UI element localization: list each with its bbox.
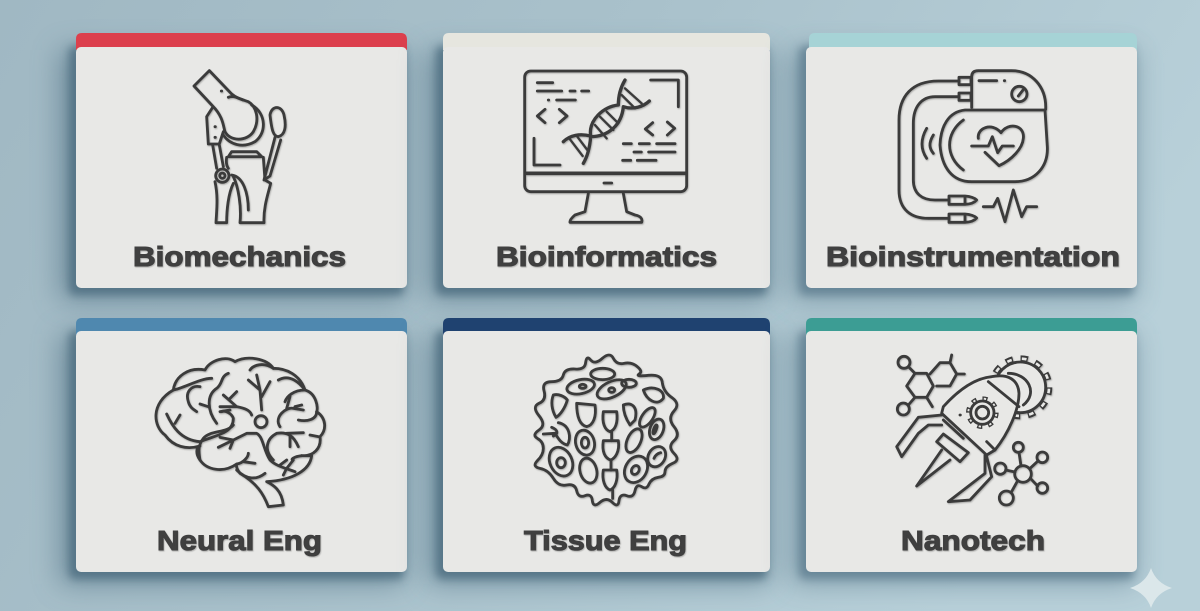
- colour strip: [76, 318, 407, 335]
- panel: Nanotech: [790, 318, 1137, 584]
- label: Bioinformatics: [496, 241, 717, 272]
- colour strip: [809, 33, 1137, 50]
- label: Biomechanics: [133, 241, 346, 272]
- label: Neural Eng: [157, 525, 322, 556]
- card body: [806, 331, 1137, 572]
- icon: computer monitor with DNA: [525, 71, 687, 222]
- card body: [806, 47, 1137, 288]
- label: Nanotech: [901, 525, 1045, 556]
- colour strip: [443, 33, 770, 50]
- icon: nanobot rocket with gears and molecules: [897, 355, 1049, 505]
- card body: [76, 47, 407, 288]
- panel: Bioinstrumentation: [790, 33, 1137, 300]
- colour strip: [443, 318, 770, 335]
- icon: knee joint: [194, 71, 285, 223]
- colour strip: [76, 33, 407, 50]
- label: Tissue Eng: [524, 525, 687, 556]
- card body: [76, 331, 407, 572]
- icon: sparkle watermark: [1130, 568, 1172, 608]
- colour strip: [806, 318, 1137, 335]
- icon: brain with neuron: [156, 358, 325, 507]
- card body: [443, 331, 770, 572]
- panel: Bioinformatics: [427, 33, 770, 300]
- label: Bioinstrumentation: [826, 241, 1120, 272]
- panel: Tissue Eng: [427, 318, 770, 584]
- panel: Biomechanics: [60, 33, 407, 300]
- icon: pacemaker: [899, 71, 1047, 222]
- card body: [443, 47, 770, 288]
- icon: tissue scaffold cube: [535, 355, 677, 505]
- panel: Neural Eng: [60, 318, 407, 584]
